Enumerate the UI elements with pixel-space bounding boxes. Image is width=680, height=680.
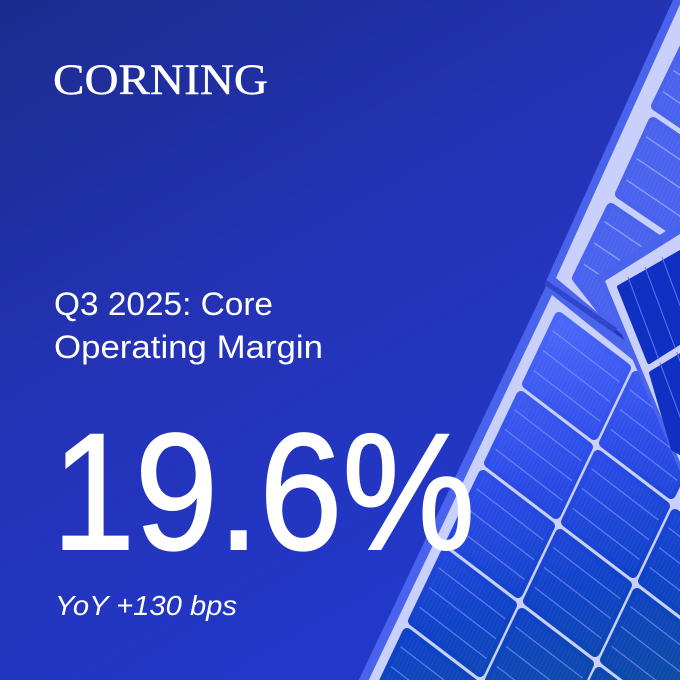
solar panel: bottom	[354, 286, 680, 680]
heading: Q3 2025 Core Operating Margin: Q3 2025: Core	[54, 286, 273, 322]
subtext: YoY +130 bps: YoY +130 bps	[55, 590, 237, 621]
heading: Q3 2025 Core Operating Margin: Operating Margin	[54, 329, 323, 365]
heading: Q3 2025 Core Operating Margin	[54, 286, 323, 365]
solar panel: small overlapping	[597, 222, 680, 472]
big number: 19.6%: 19.6%	[52, 400, 475, 585]
logo: CORNING: CORNING	[53, 57, 268, 104]
solar panel: top	[544, 0, 680, 400]
